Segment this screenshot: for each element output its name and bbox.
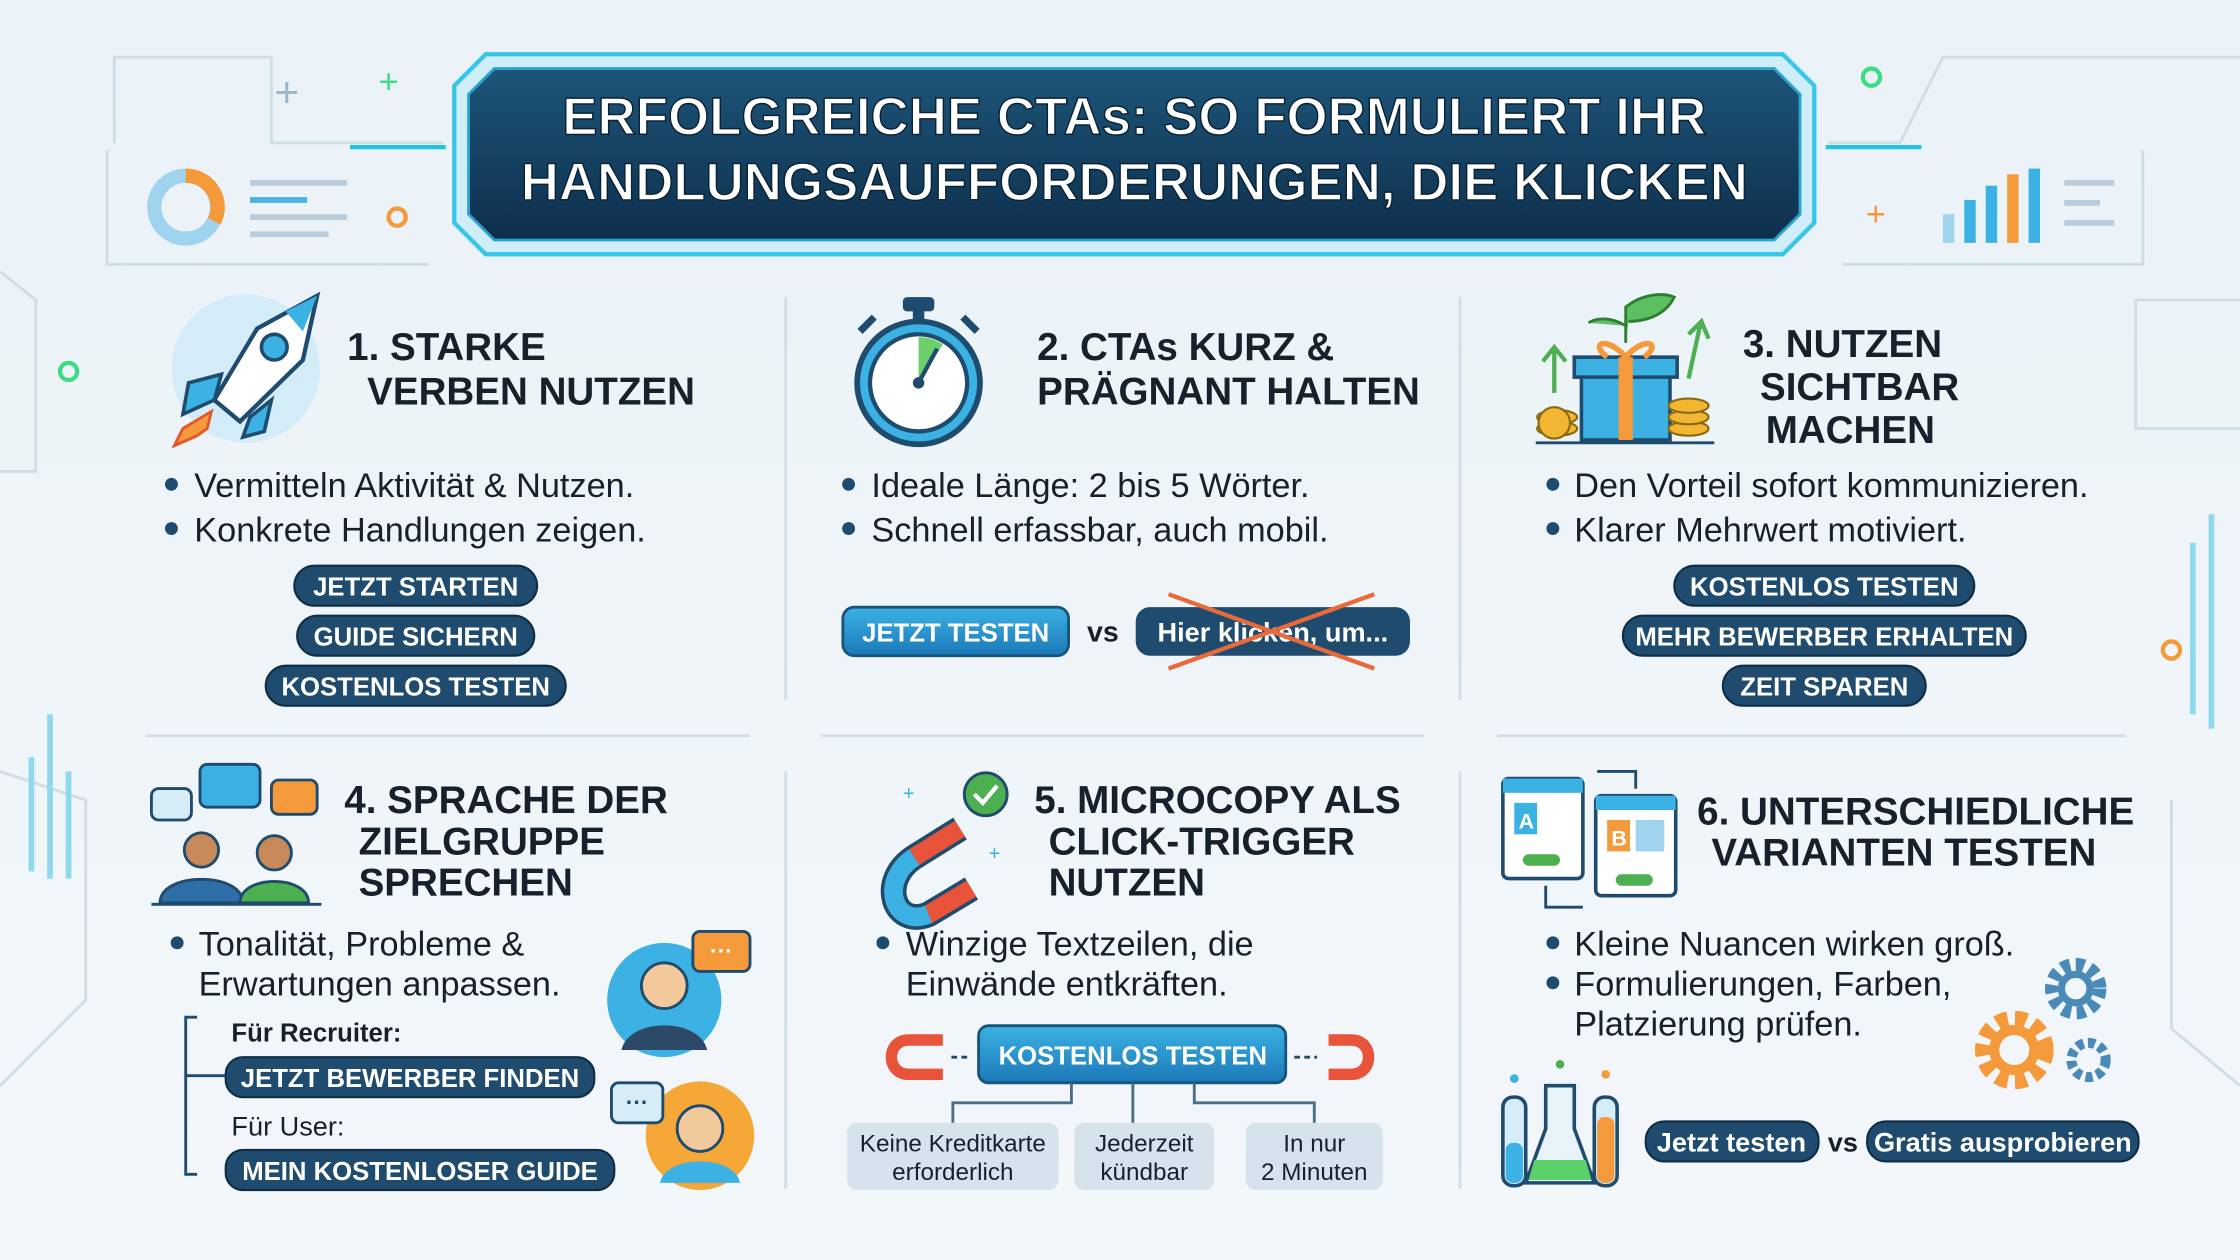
icon: gift with coins (1536, 295, 1714, 443)
panel 3: nutzen sichtbar (1536, 295, 2088, 706)
comparison pills 6: Gratis ausprobieren (1874, 1126, 2132, 1157)
heading 1: 1. STARKE (347, 326, 546, 369)
audience tree: Für User: (231, 1111, 344, 1142)
comparison buttons 2: vs (1087, 616, 1119, 648)
microcopy diagram: erforderlich (892, 1159, 1014, 1186)
comparison pills 6 (1646, 1121, 2139, 1161)
heading 3: SICHTBAR (1760, 366, 1959, 409)
icon: stopwatch (857, 297, 980, 444)
icon: magnet with check: + (903, 783, 915, 805)
heading 3: MACHEN (1766, 409, 1935, 452)
icon: avatars: ··· (710, 938, 733, 964)
icon: avatars (607, 931, 754, 1190)
icon: test tubes (1503, 1060, 1617, 1186)
icon: avatars: ··· (626, 1089, 649, 1115)
microcopy diagram: In nur (1283, 1130, 1345, 1157)
pills 3: KOSTENLOS TESTEN (1690, 574, 1959, 602)
icon: magnet with check: + (989, 843, 1000, 865)
pills 1: JETZT STARTEN (313, 574, 518, 602)
deco chart left (154, 176, 347, 239)
panel 4: sprache der zielgruppe (151, 764, 754, 1190)
text: + (274, 69, 299, 117)
comparison pills 6: Jetzt testen (1657, 1126, 1806, 1157)
audience tree: JETZT BEWERBER FINDEN (241, 1065, 579, 1093)
bullets 2: Schnell erfassbar, auch mobil. (871, 511, 1329, 549)
bullets 1: Vermitteln Aktivität & Nutzen. (194, 467, 634, 505)
icon: people with speech bubbles (151, 764, 321, 904)
panel 5: microcopy (847, 773, 1401, 1190)
pills 3: MEHR BEWERBER ERHALTEN (1635, 624, 2013, 652)
panel 1: starke verben (165, 294, 695, 706)
title banner: ERFOLGREICHE CTAs: SO FORMULIERT IHR (562, 87, 1706, 146)
heading 1 (347, 326, 695, 413)
title banner (454, 54, 1814, 254)
text: + (379, 63, 399, 101)
bullets 5 (876, 926, 1254, 1004)
heading 6 (1697, 790, 2134, 875)
bullets 6: Platzierung prüfen. (1574, 1006, 1862, 1044)
pills 3: ZEIT SPAREN (1740, 674, 1908, 702)
bullets 4: Tonalität, Probleme & (199, 926, 524, 964)
bullets 3: Klarer Mehrwert motiviert. (1574, 511, 1967, 549)
microcopy diagram: Keine Kreditkarte (860, 1130, 1046, 1157)
heading 2: 2. CTAs KURZ & (1037, 326, 1334, 369)
comparison buttons 2: JETZT TESTEN (862, 619, 1049, 647)
deco chart right (1943, 169, 2114, 243)
audience tree: Für Recruiter: (231, 1019, 401, 1047)
heading 3: 3. NUTZEN (1743, 323, 1942, 366)
microcopy diagram: 2 Minuten (1261, 1159, 1368, 1186)
bullets 2 (842, 467, 1329, 549)
comparison pills 6: vs (1828, 1126, 1858, 1157)
icon: rocket (171, 294, 320, 446)
heading 4: ZIELGRUPPE (359, 820, 605, 863)
heading 5: 5. MICROCOPY ALS (1034, 779, 1401, 822)
icon: A/B screens: A (1519, 810, 1534, 834)
comparison buttons 2: Hier klicken, um... (1158, 616, 1388, 647)
bullets 3: Den Vorteil sofort kommunizieren. (1574, 467, 2088, 505)
microcopy diagram: kündbar (1100, 1159, 1188, 1186)
text: + (1866, 196, 1886, 234)
icon: magnet with check (894, 773, 1007, 917)
audience tree (186, 1017, 614, 1190)
heading 4: 4. SPRACHE DER (344, 779, 668, 822)
pills 1 (266, 566, 566, 706)
bullets 5: Winzige Textzeilen, die (906, 926, 1254, 964)
pills 3 (1623, 566, 2026, 706)
bullets 4: Erwartungen anpassen. (199, 966, 561, 1004)
heading 2: PRÄGNANT HALTEN (1037, 370, 1420, 413)
heading 5: NUTZEN (1049, 862, 1205, 905)
bullets 5: Einwände entkräften. (906, 966, 1228, 1004)
bullets 6: Kleine Nuancen wirken groß. (1574, 926, 2014, 964)
panel 2: kurz & prägnant (842, 297, 1420, 669)
comparison buttons 2 (843, 594, 1410, 669)
bullets 6: Formulierungen, Farben, (1574, 966, 1951, 1004)
bullets 1: Konkrete Handlungen zeigen. (194, 511, 646, 549)
heading 6: 6. UNTERSCHIEDLICHE (1697, 790, 2134, 833)
icon: A/B screens (1503, 771, 1676, 907)
bullets 3 (1546, 467, 2088, 549)
icon: gears (1983, 964, 2106, 1081)
microcopy diagram: Jederzeit (1095, 1130, 1194, 1157)
title banner: HANDLUNGSAUFFORDERUNGEN, DIE KLICKEN (521, 153, 1748, 212)
microcopy diagram: KOSTENLOS TESTEN (999, 1042, 1267, 1070)
bullets 2: Ideale Länge: 2 bis 5 Wörter. (871, 467, 1310, 505)
heading 2 (1037, 326, 1420, 413)
heading 5: CLICK-TRIGGER (1049, 820, 1355, 863)
microcopy diagram (847, 1026, 1383, 1190)
heading 4: SPRECHEN (359, 862, 573, 905)
heading 6: VARIANTEN TESTEN (1711, 832, 2096, 875)
bullets 1 (165, 467, 646, 549)
bullets 6 (1546, 926, 2014, 1044)
heading 1: VERBEN NUTZEN (367, 370, 695, 413)
pills 1: GUIDE SICHERN (314, 624, 518, 652)
pills 1: KOSTENLOS TESTEN (281, 674, 550, 702)
bullets 4 (171, 926, 561, 1004)
heading 3 (1743, 323, 1959, 452)
audience tree: MEIN KOSTENLOSER GUIDE (242, 1158, 598, 1186)
icon: A/B screens: B (1611, 827, 1627, 851)
heading 5 (1034, 779, 1401, 905)
heading 4 (344, 779, 668, 905)
panel 6: varianten testen (1503, 771, 2139, 1186)
